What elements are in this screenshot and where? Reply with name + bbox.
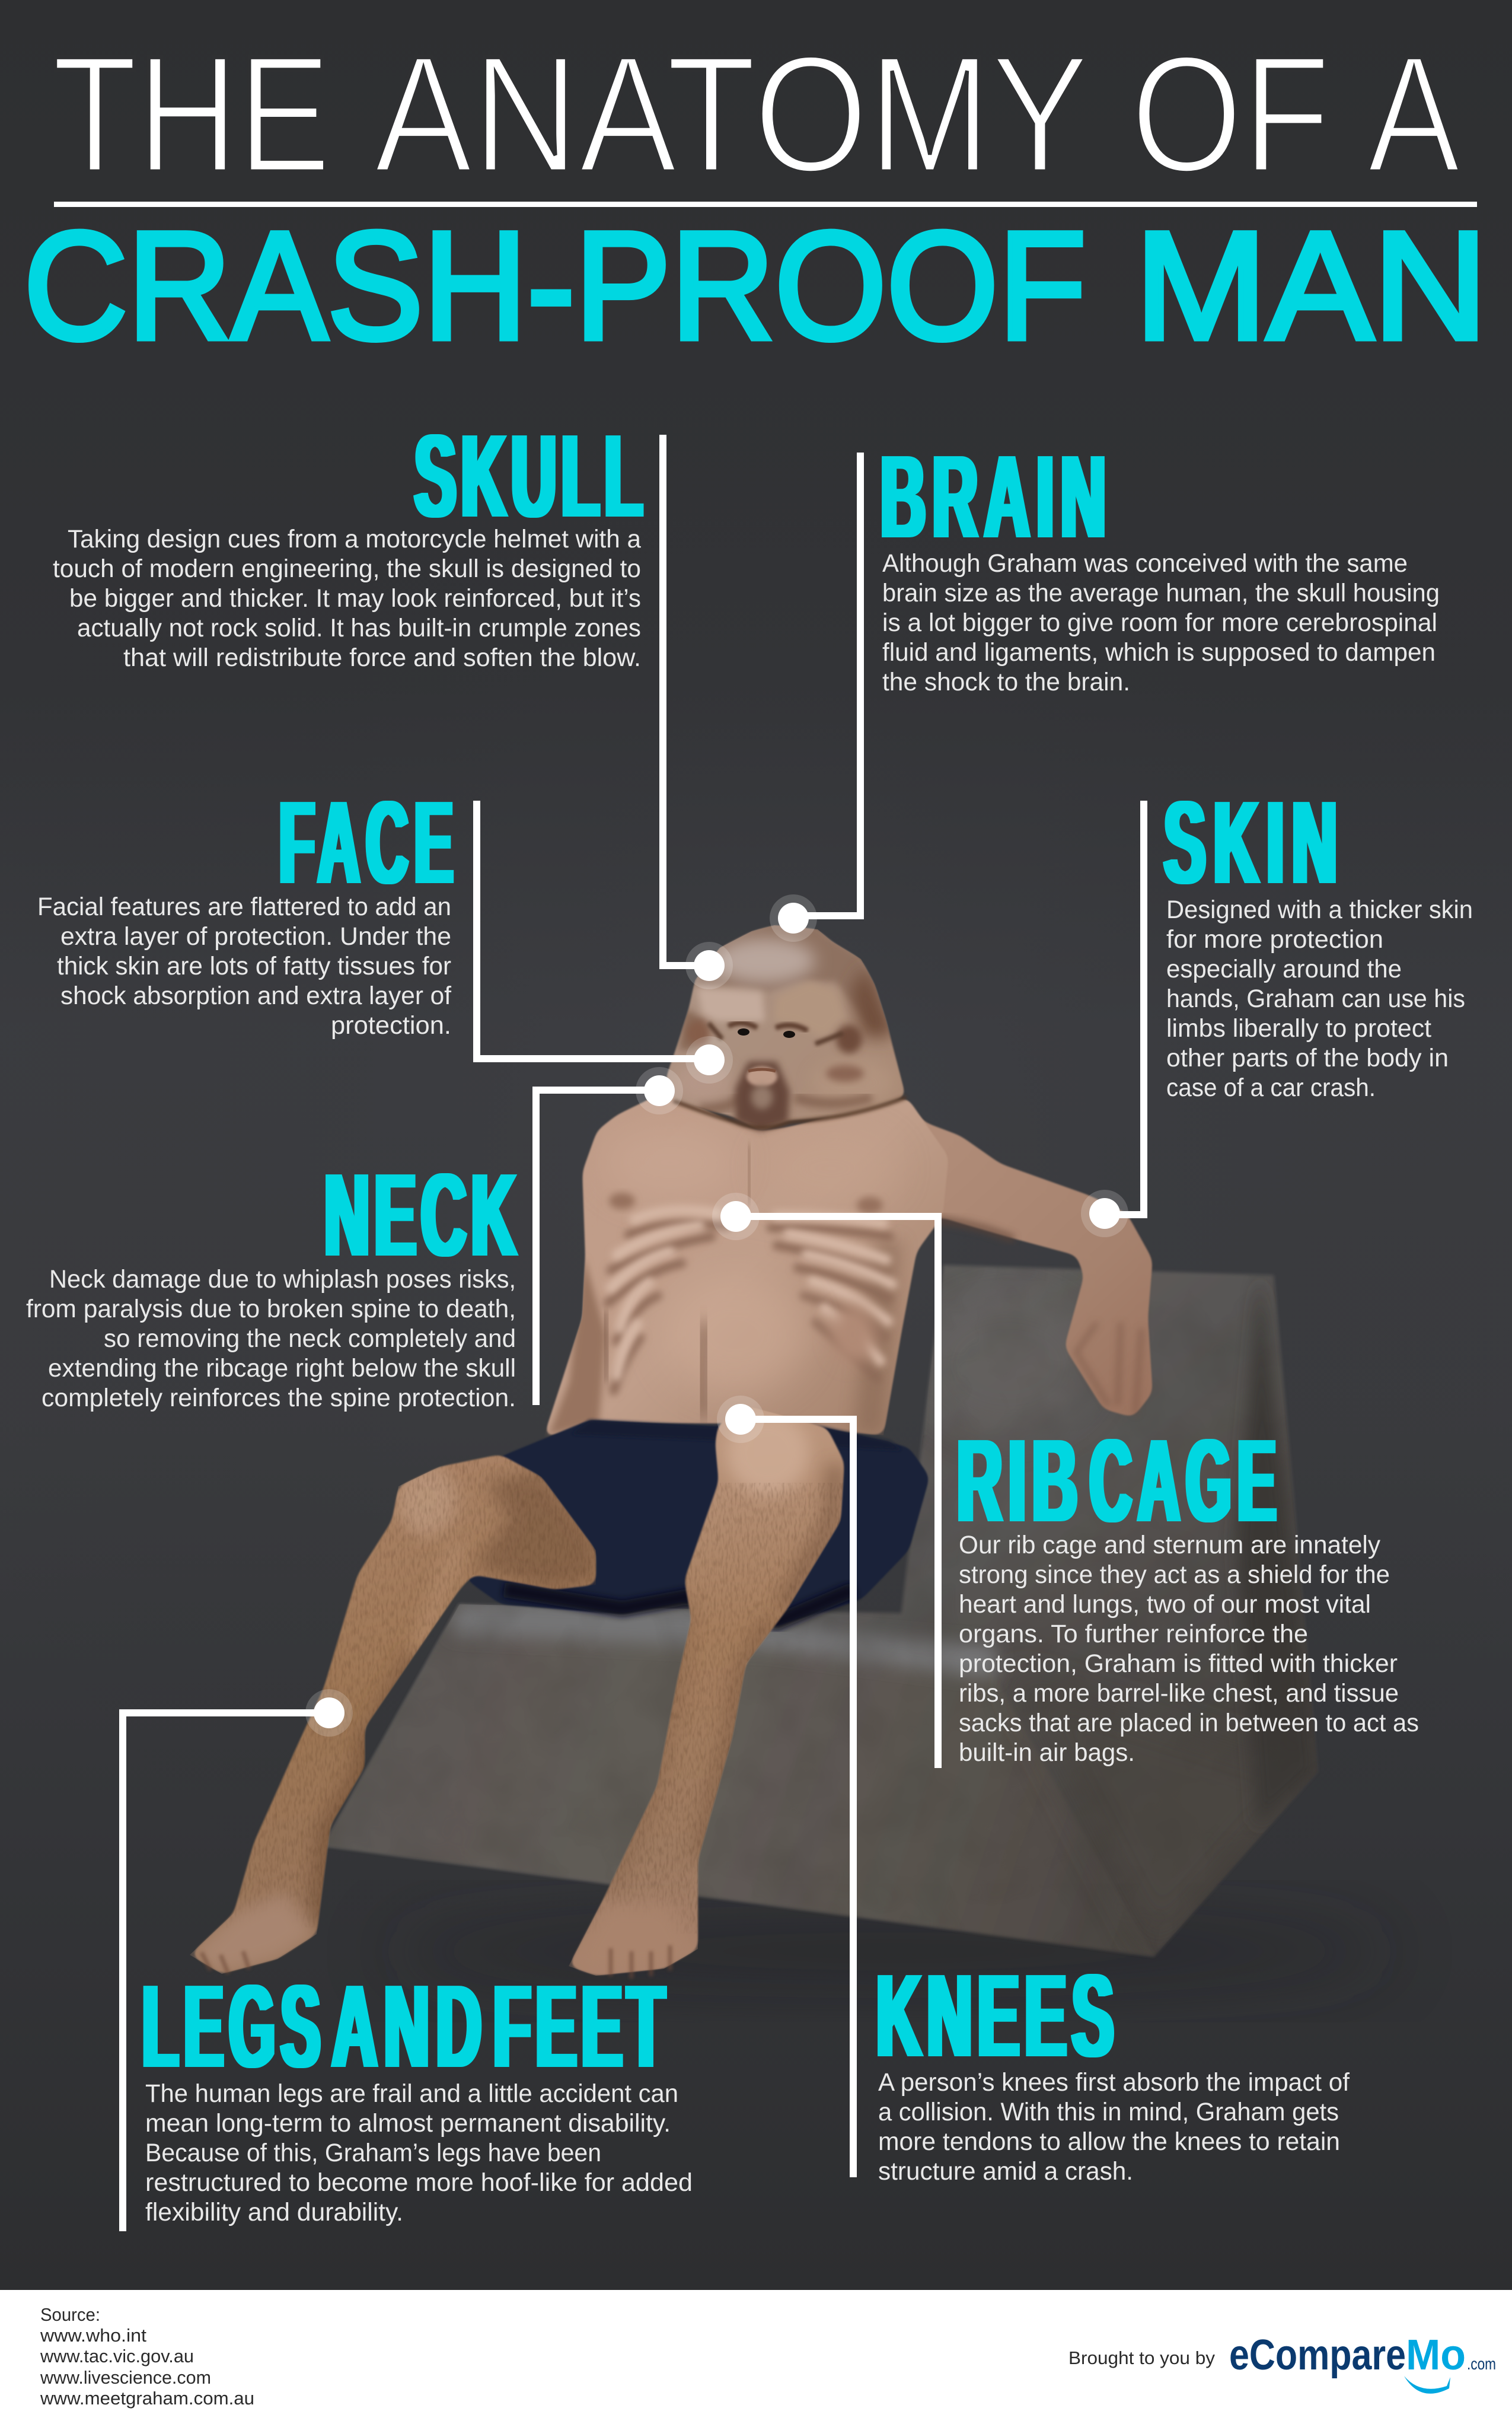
text: skull: be bigger and thicker. It may look reinforced, but it’s (69, 584, 641, 613)
title line two: MAN (1135, 200, 1488, 371)
sources: Source: (40, 2304, 100, 2325)
text: skull: that will redistribute force and soften the blow. (123, 644, 641, 672)
forehead panels (697, 988, 765, 1021)
text: skin: case of a car crash. (1166, 1074, 1376, 1102)
panel: neck (26, 1149, 516, 1412)
heading: brain: BRAIN (881, 431, 1106, 562)
text: knees: a collision. With this in mind, Graham gets (878, 2098, 1339, 2126)
jowls (812, 1059, 895, 1106)
ribs (608, 1210, 892, 1391)
title line one: ANATOMY (374, 22, 1089, 207)
heading: skin: SKIN (1164, 776, 1337, 908)
text: brain: fluid and ligaments, which is supposed to dampen (882, 638, 1436, 667)
text: brain: is a lot bigger to give room for more cerebrospinal (882, 609, 1437, 637)
text: skin: other parts of the body in (1166, 1044, 1449, 1072)
marker: brain (770, 894, 817, 942)
neck line (536, 1090, 659, 1405)
text: neck: so removing the neck completely and (104, 1324, 516, 1353)
text: rib cage: built-in air bags. (959, 1738, 1135, 1767)
title line one: OF (1131, 22, 1331, 207)
beard (735, 1062, 790, 1131)
text: rib cage: organs. To further reinforce the (959, 1620, 1308, 1648)
text: rib cage: strong since they act as a shield for the (959, 1560, 1390, 1589)
footer (0, 2290, 1512, 2424)
heading: neck: NECK (324, 1149, 516, 1281)
left leg shading (190, 1453, 599, 1974)
sources: www.meetgraham.com.au (40, 2388, 254, 2409)
text: legs and feet: mean long-term to almost permanent disability. (145, 2109, 671, 2138)
text: legs and feet: The human legs are frail and a little accident can (145, 2079, 678, 2108)
eyes (728, 1023, 808, 1038)
face line (477, 801, 709, 1059)
marker: skull (685, 942, 733, 989)
logo: eCompareMo: Mo (1406, 2331, 1466, 2379)
arm armpit shadow (925, 1219, 1014, 1240)
text: skull: Taking design cues from a motorcycle helmet with a (68, 525, 641, 553)
heading: legs and feet: FEET (493, 1960, 665, 2092)
text: skull: touch of modern engineering, the skull is designed to (53, 555, 641, 583)
heading: legs and feet (142, 1960, 665, 2092)
text: skull (53, 525, 641, 672)
head (665, 922, 906, 1131)
ears (687, 1020, 710, 1046)
heading: legs and feet: AND (332, 1960, 481, 2092)
legs line (123, 1713, 329, 2231)
text: brain: Although Graham was conceived with the same (882, 549, 1408, 578)
rib cage line (736, 1216, 938, 1768)
shorts (467, 1420, 930, 1627)
text: knees (878, 2068, 1350, 2186)
brain line (794, 453, 860, 916)
hair (691, 922, 889, 1032)
text: knees: A person’s knees first absorb the impact of (878, 2068, 1350, 2097)
heading: rib cage (957, 1415, 1276, 1547)
text: brain: brain size as the average human, the skull housing (882, 579, 1440, 607)
logo swoosh (1404, 2376, 1450, 2394)
text: skin: for more protection (1166, 925, 1383, 954)
arm right (907, 1103, 1153, 1418)
text: knees: structure amid a crash. (878, 2157, 1133, 2186)
illustration: man (190, 922, 1153, 1979)
text: neck: extending the ribcage right below the skull (48, 1354, 516, 1383)
right leg (569, 1406, 844, 1976)
text: legs and feet: restructured to become more hoof-like for added (145, 2168, 693, 2197)
marker: legs (305, 1689, 353, 1737)
skull line (663, 435, 709, 966)
text: skin (1166, 896, 1473, 1102)
title line one: A (1367, 22, 1461, 207)
sources: www.livescience.com (40, 2367, 211, 2388)
title rule (54, 202, 1477, 207)
right foot toes (611, 1945, 670, 1979)
knees line (741, 1419, 853, 2177)
skin line (1105, 801, 1144, 1215)
text: face: shock absorption and extra layer of (60, 982, 452, 1010)
logo: eCompareMo: .com (1467, 2355, 1496, 2373)
heading: skull: SKULL (414, 410, 643, 542)
text: rib cage: sacks that are placed in between to act as (959, 1709, 1419, 1737)
panel: face (37, 777, 453, 1040)
heading: rib cage: RIB (957, 1415, 1077, 1546)
text: neck: completely reinforces the spine protection. (42, 1384, 516, 1412)
left foot toes (202, 1951, 249, 1974)
text: rib cage: ribs, a more barrel-like chest, and tissue (959, 1679, 1399, 1708)
logo: eCompareMo (1229, 2331, 1496, 2394)
text: knees: more tendons to allow the knees to retain (878, 2127, 1340, 2156)
text: neck (26, 1265, 516, 1412)
text: legs and feet: Because of this, Graham’s legs have been (145, 2139, 601, 2167)
text: rib cage (959, 1531, 1419, 1767)
neck crease (673, 1097, 906, 1127)
text: legs and feet: flexibility and durability. (145, 2198, 403, 2226)
text: skin: Designed with a thicker skin (1166, 896, 1473, 924)
text: face: thick skin are lots of fatty tissues for (57, 952, 451, 980)
torso (543, 1091, 949, 1438)
panel: rib cage (957, 1415, 1419, 1767)
text: rib cage: heart and lungs, two of our most vital (959, 1590, 1371, 1619)
chest and abdomen tone (690, 1295, 800, 1388)
text: skin: hands, Graham can use his (1166, 985, 1465, 1013)
text: face: extra layer of protection. Under the (60, 922, 451, 951)
text: face: Facial features are flattered to add an (37, 893, 451, 921)
title line one (52, 22, 1461, 207)
right leg shading (563, 1412, 848, 1976)
brow fold (709, 1023, 843, 1044)
text: brain (882, 549, 1440, 696)
illustration: concrete block (320, 1263, 1393, 1987)
text: rib cage: Our rib cage and sternum are innately (959, 1531, 1380, 1559)
text: skin: especially around the (1166, 955, 1402, 983)
sources: www.who.int (40, 2325, 146, 2346)
heading: legs and feet: LEGS (142, 1961, 320, 2092)
text: legs and feet (145, 2079, 693, 2226)
heading: face: FACE (279, 777, 453, 909)
shorts waistband and shadow (504, 1420, 901, 1622)
text: neck: Neck damage due to whiplash poses risks, (49, 1265, 516, 1294)
sources: www.tac.vic.gov.au (40, 2346, 194, 2366)
heading: rib cage: CAGE (1090, 1415, 1276, 1547)
marker: skin (1081, 1190, 1128, 1237)
panel: skull (53, 410, 643, 672)
connector lines (123, 435, 1144, 2231)
title (24, 22, 1488, 371)
logo: eCompareMo: eCompare (1229, 2331, 1406, 2379)
title line one: THE (52, 22, 331, 207)
heading: knees: KNEES (876, 1950, 1114, 2081)
text: brain: the shock to the brain. (882, 668, 1130, 696)
marker: knees (717, 1396, 764, 1443)
nose (754, 1050, 772, 1055)
text: skin: limbs liberally to protect (1166, 1014, 1431, 1043)
title line two: CRASH-PROOF (24, 200, 1086, 371)
text: skull: actually not rock solid. It has built-in crumple zones (77, 614, 641, 642)
torso shading (548, 1127, 901, 1435)
panel: legs and feet (142, 1960, 693, 2226)
left leg (190, 1454, 596, 1974)
text: rib cage: protection, Graham is fitted with thicker (959, 1649, 1398, 1678)
text: face (37, 893, 452, 1040)
lower face shadow (700, 1097, 872, 1109)
cheek shadow (826, 1065, 864, 1082)
marker: rib cage (712, 1193, 760, 1240)
marker: neck (636, 1067, 683, 1114)
brought to you by: Brought to you by (1068, 2347, 1215, 2368)
panel: brain (881, 431, 1440, 696)
sources (40, 2304, 254, 2409)
panel: knees (876, 1950, 1350, 2186)
panel: skin (1164, 776, 1473, 1102)
text: face: protection. (331, 1011, 451, 1040)
marker: face (685, 1036, 733, 1084)
text: neck: from paralysis due to broken spine to death, (26, 1295, 516, 1323)
hand shading (1076, 1323, 1141, 1415)
